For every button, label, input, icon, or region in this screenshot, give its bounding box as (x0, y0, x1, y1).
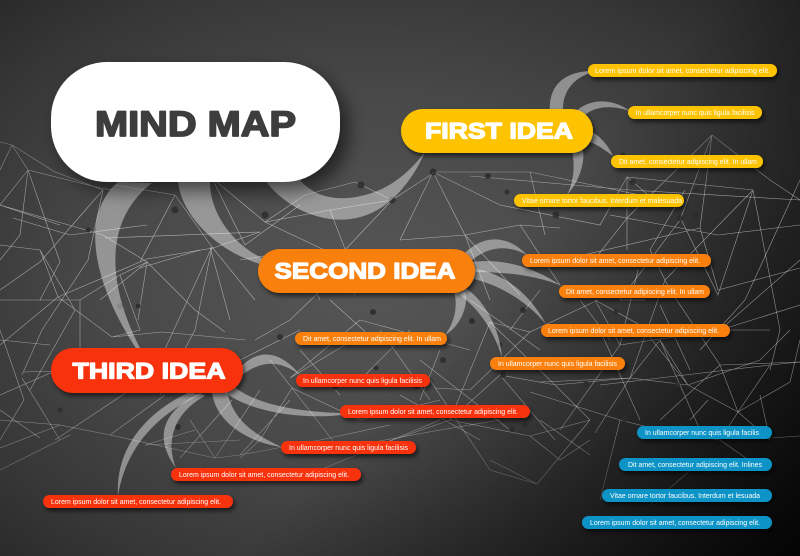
blue item 3 (602, 489, 772, 502)
third idea item 4: Lorem ipsum dolor sit amet, consectetur adipiscing elit. (179, 470, 349, 479)
panel: third idea (43, 348, 530, 508)
second idea item 1: Lorem ipsum dolor sit amet, consectetur adipiscing elit. (530, 256, 700, 265)
panel: second idea (258, 249, 730, 370)
third idea item 2: Lorem ipsum dolor sit amet, consectetur adipiscing elit. (348, 407, 518, 416)
third idea item 2 (340, 405, 530, 418)
first idea item 3: Dit amet, consectetur adipiscing elit. In ullam (619, 157, 757, 166)
third idea item 3: In ullamcorper nunc quis ligula facilisis (289, 443, 408, 452)
second idea heading pill (258, 249, 475, 293)
first idea item 4: Vitae ornare tortor faucibus. Interdum et malesuada (522, 196, 683, 205)
mesh nodes (58, 152, 699, 448)
first idea item 1: Lorem ipsum dolor sit amet, consectetur adipiscing elit. (595, 66, 770, 75)
third idea item 3 (281, 441, 416, 454)
second idea item 4: In ullamcorper nunc quis ligula facilisis (498, 359, 617, 368)
blue item 1 (637, 426, 772, 439)
blue item 4: Lorem ipsum dolor sit amet, consectetur adipiscing elit. (590, 518, 760, 527)
first idea heading pill: FIRST IDEA (425, 119, 573, 144)
connector: mind map to first idea (265, 152, 425, 220)
third idea item 5: Lorem ipsum dolor sit amet, consectetur adipiscing elit. (51, 497, 221, 506)
connectors: third idea branches (118, 354, 342, 496)
blue item 2 (619, 458, 772, 471)
first idea item 2: In ullamcorper nunc quis ligula facilisis (636, 108, 755, 117)
first idea item 4 (514, 194, 684, 207)
third idea item 1: In ullamcorper nunc quis ligula facilisis (303, 376, 422, 385)
central node: mind map: MIND MAP (95, 104, 296, 144)
connector: mind map to second idea (178, 182, 262, 264)
second idea item 1 (522, 254, 711, 267)
first idea item 2 (628, 106, 762, 119)
blue item 4 (582, 516, 772, 529)
second idea heading pill: SECOND IDEA (274, 259, 456, 284)
second idea item 2 (559, 285, 710, 298)
central node: mind map (51, 62, 340, 182)
blue item 1: In ullamcorper nunc quis ligula facilis (645, 428, 759, 437)
second idea item 4 (490, 357, 625, 370)
second idea item 5 (295, 332, 447, 345)
second idea item 3 (541, 324, 730, 337)
panel: blue items (582, 426, 772, 529)
first idea heading pill (401, 109, 593, 153)
third idea item 1 (296, 374, 430, 387)
third idea heading pill (51, 348, 243, 393)
blue item 3: Vitae ornare tortor faucibus. Interdum et lesuada (610, 491, 761, 500)
blue item 2: Dit amet, consectetur adipiscing elit. Inlines (628, 460, 762, 469)
third idea item 5 (43, 495, 233, 508)
connector: mind map to third idea (95, 182, 152, 350)
connectors: first idea branches (550, 71, 630, 195)
first idea item 1 (588, 64, 777, 77)
polygon network mesh background (0, 135, 800, 505)
third idea item 4 (171, 468, 361, 481)
panel: first idea (401, 64, 777, 207)
third idea heading pill: THIRD IDEA (72, 359, 226, 384)
connectors: second idea branches (445, 239, 562, 357)
second idea item 5: Dit amet, consectetur adipiscing elit. In ullam (303, 334, 441, 343)
second idea item 3: Lorem ipsum dolor sit amet, consectetur adipiscing elit. (548, 326, 719, 335)
second idea item 2: Dit amet, consectetur adipiscing elit. In ullam (566, 287, 704, 296)
first idea item 3 (611, 155, 763, 168)
